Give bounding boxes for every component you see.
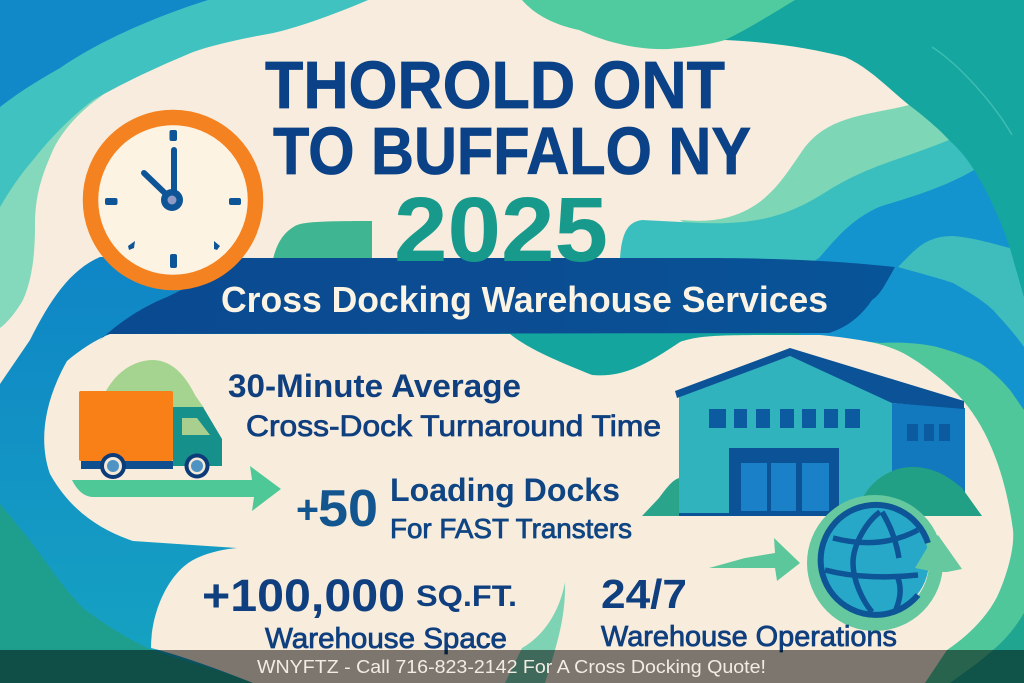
background: lower blue swoosh bbox=[0, 257, 830, 683]
stat: warehouse space: Warehouse Space bbox=[265, 623, 507, 655]
stat: warehouse space bbox=[202, 570, 517, 655]
clock icon bbox=[90, 118, 256, 282]
stat: turnaround time: 30-Minute Average bbox=[228, 368, 521, 404]
warehouse building icon bbox=[642, 348, 982, 516]
truck icon with arrow bbox=[72, 360, 281, 511]
stat: loading docks bbox=[296, 472, 632, 544]
arrow under truck bbox=[72, 466, 281, 511]
year: 2025 bbox=[394, 179, 608, 281]
footer text: WNYFTZ - Call 716-823-2142 For A Cross Docking Quote! bbox=[257, 657, 766, 677]
globe icon bbox=[814, 502, 962, 624]
background waves: top left bbox=[0, 0, 368, 328]
stat: loading docks: + bbox=[296, 488, 319, 532]
stat: warehouse space: SQ.FT. bbox=[416, 580, 517, 613]
stat: turnaround time bbox=[228, 368, 661, 443]
mint swoosh bbox=[505, 582, 565, 683]
background waves: right side bbox=[522, 0, 1024, 440]
green bump behind banner bbox=[273, 221, 372, 259]
arrow to globe bbox=[709, 538, 800, 581]
stat: warehouse space: +100,000 bbox=[202, 570, 405, 621]
banner bbox=[100, 258, 895, 340]
stat: loading docks: 50 bbox=[318, 480, 378, 538]
footer bar bbox=[0, 650, 1024, 683]
lower right teal corner bbox=[950, 613, 1024, 683]
stat: turnaround time: Cross-Dock Turnaround Time bbox=[246, 410, 661, 443]
cream content panel bbox=[44, 334, 1013, 683]
stat: 24/7 operations: Warehouse Operations bbox=[601, 621, 897, 653]
title line 1: THOROLD ONT bbox=[265, 48, 725, 123]
banner text: Cross Docking Warehouse Services bbox=[221, 279, 828, 320]
stat: 24/7 operations bbox=[601, 571, 897, 653]
stat: 24/7 operations: 24/7 bbox=[601, 571, 687, 617]
title line 2: TO BUFFALO NY bbox=[273, 114, 751, 189]
stat: loading docks: For FAST Transters bbox=[390, 513, 632, 544]
stat: loading docks: Loading Docks bbox=[390, 472, 620, 508]
globe arrow head bbox=[915, 535, 962, 572]
right mint band bbox=[870, 342, 1024, 683]
